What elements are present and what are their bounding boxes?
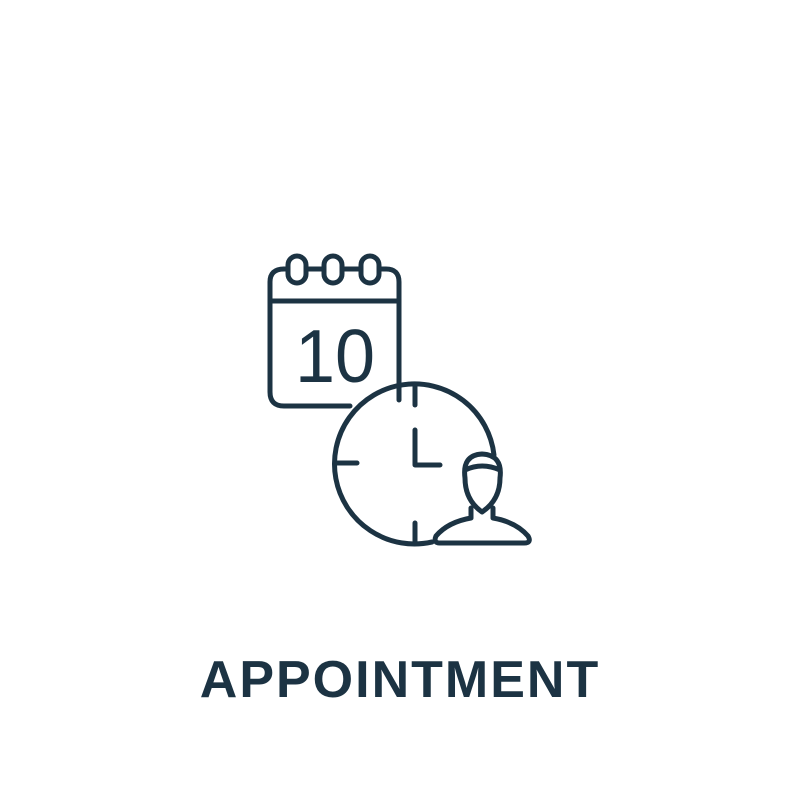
title: APPOINTMENT — [200, 651, 600, 709]
icon: clock — [335, 384, 494, 544]
icon: calendar — [270, 256, 399, 406]
icon: calendar: 10 — [295, 313, 375, 398]
icon: person — [435, 454, 529, 543]
